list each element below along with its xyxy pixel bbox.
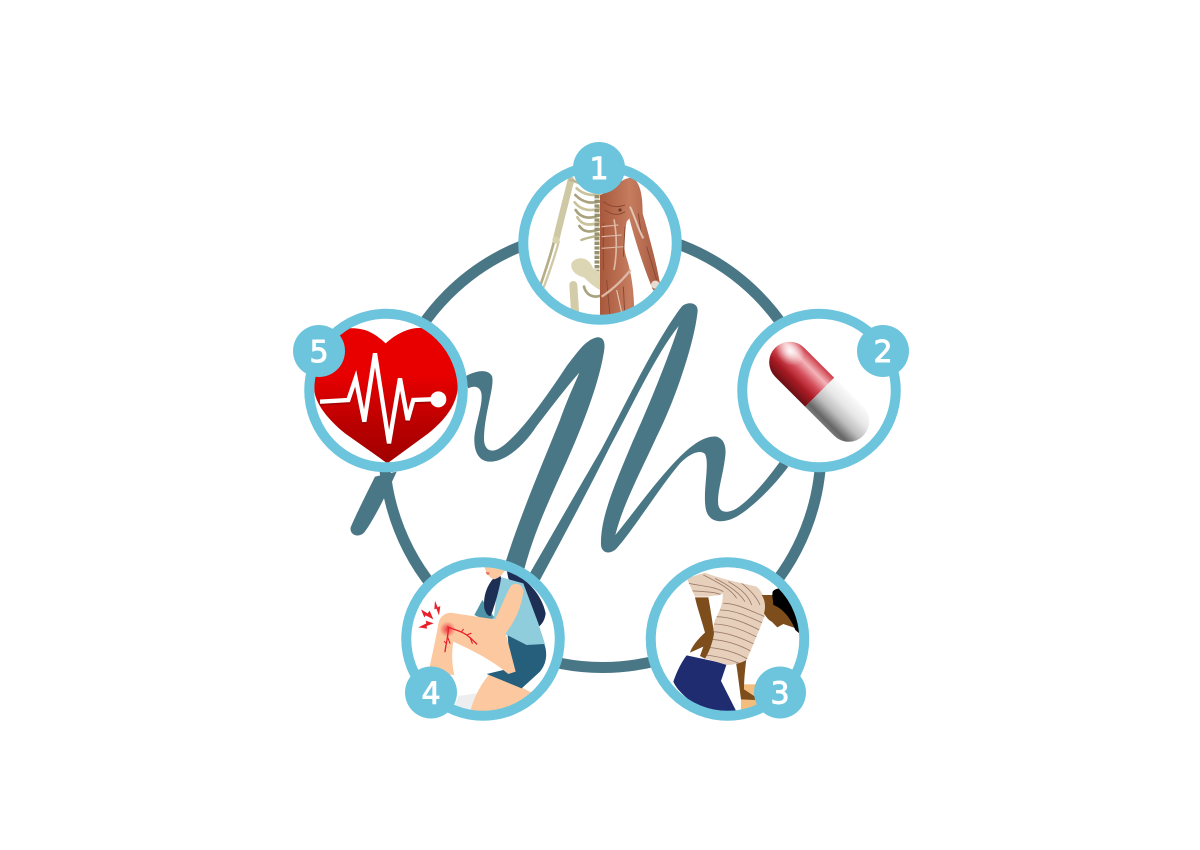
badge: [293, 325, 345, 377]
skeleton half: [540, 180, 601, 317]
muscle half: [600, 178, 660, 320]
item 3: person with back pain: [650, 562, 806, 718]
infographic canvas: [293, 142, 909, 721]
number 4: 4: [421, 676, 441, 712]
face: [484, 567, 505, 580]
lips: [486, 572, 490, 575]
ring: [309, 314, 463, 467]
item 2: capsule pill: [742, 314, 909, 468]
icon: anatomy figure: [540, 178, 660, 320]
ECG trace shadow: [320, 368, 431, 446]
trousers: [673, 655, 737, 713]
front leg and arm: [428, 584, 523, 675]
badge: [857, 325, 909, 377]
large connecting ring: [384, 230, 821, 668]
pain sparks: [418, 601, 440, 629]
number 3: 3: [770, 676, 790, 712]
shorts: [487, 635, 546, 688]
muscle details: [602, 202, 657, 320]
stool: [741, 684, 758, 711]
back sleeve: [474, 600, 495, 620]
badge: [754, 666, 806, 718]
icon: bending person: [673, 573, 799, 713]
hair right: [507, 570, 546, 627]
veins: [444, 627, 477, 652]
hair: [772, 588, 799, 633]
number 2: 2: [873, 335, 893, 370]
hair left: [484, 573, 501, 616]
far arm: [736, 660, 755, 700]
nipple: [618, 208, 622, 212]
near arm and hand: [690, 597, 714, 659]
icon: capsule: [759, 331, 878, 450]
badge: [405, 666, 457, 718]
shirt: [687, 573, 766, 665]
ring: [523, 166, 677, 320]
ECG trace: [320, 353, 432, 443]
ring: [406, 562, 560, 716]
shirt stripes: [688, 575, 765, 665]
ring: [651, 562, 804, 716]
item 4: woman with knee pain: [405, 562, 560, 718]
ECG end dot: [430, 391, 446, 407]
wrist band: [651, 281, 660, 289]
item 5: heart with ECG line: [293, 314, 463, 468]
pain glow: [440, 622, 455, 637]
rear leg: [470, 675, 531, 711]
item 1: skeleton and muscle anatomy: [523, 142, 677, 320]
icon: kneeling woman: [418, 566, 546, 713]
icon: heart: [314, 328, 458, 463]
shoe: [455, 694, 476, 710]
neck and face: [762, 595, 796, 628]
badge: [573, 142, 625, 194]
top: [494, 577, 545, 647]
signature monogram: [351, 303, 788, 580]
pelvis: [571, 258, 600, 290]
number 5: 5: [309, 335, 329, 370]
ring: [742, 314, 896, 467]
number 1: 1: [589, 152, 609, 187]
